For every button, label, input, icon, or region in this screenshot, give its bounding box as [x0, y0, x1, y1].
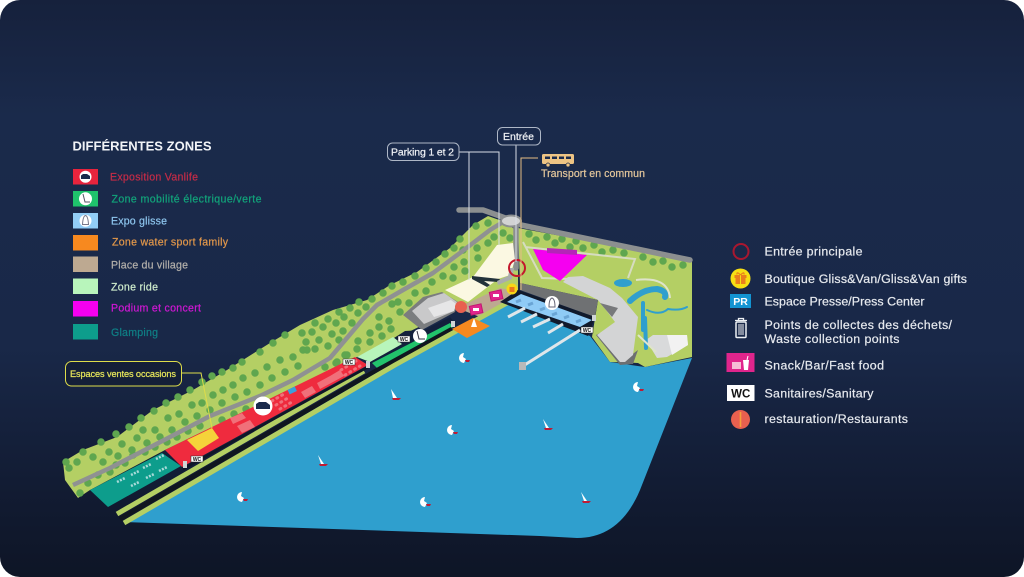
legend item: Zone mobilité: Zone mobilité électrique/verte: [112, 194, 262, 206]
callout: entrance: Entrée: [503, 131, 534, 143]
map icon: WC marker 2: [343, 359, 355, 366]
white east paths: [636, 279, 670, 352]
service: Points de collecte: Points de collectes des déchets/: [764, 318, 953, 332]
service: Snack: Snack/Bar/Fast food: [764, 358, 884, 372]
piers: [508, 308, 580, 366]
map icon: glisse: [545, 296, 559, 310]
legend: zones: [72, 138, 262, 340]
parking area: [445, 243, 515, 302]
map icon: restaurant: [455, 301, 467, 313]
map icon: van: [254, 396, 272, 416]
callout: used sales: [66, 362, 212, 428]
service: Points de collecte: [735, 318, 953, 346]
legend item: Zone water sport family: [73, 235, 229, 250]
pier head: [519, 362, 526, 370]
legend item: Zone ride: Zone ride: [111, 282, 158, 294]
service: Sanitaires: [727, 385, 874, 401]
electric mobility zone: [372, 323, 453, 369]
vanlife booths: [272, 361, 360, 409]
legend heading: DIFFÉRENTES ZONES: [72, 138, 212, 154]
teal glamping zone: [90, 453, 181, 507]
legend item: Zone mobilité: [73, 191, 262, 206]
map icon: WC marker 4: [581, 327, 593, 334]
event plaza: [563, 276, 688, 365]
village plaza: [457, 288, 520, 317]
legend: services: [726, 244, 967, 429]
map icon: WC marker 3: WC: [400, 337, 409, 343]
sailboat: round sail: [237, 353, 644, 507]
legend item: Podium et concert: [73, 301, 201, 316]
service: Entrée principale: Entrée principale: [764, 244, 863, 258]
callout: used sales: Espaces ventes occasions: [70, 369, 176, 379]
legend item: Place du village: [73, 256, 188, 272]
service: Espace Presse: PR: [733, 296, 748, 308]
service: Points de collecte: Waste collection points: [764, 332, 900, 346]
callout: parking: [388, 143, 499, 280]
trees: [66, 223, 683, 493]
podium and concert: [533, 248, 587, 281]
legend item: Podium et concert: Podium et concert: [111, 302, 201, 314]
legend item: Zone ride: [73, 278, 158, 294]
roundabout: [501, 216, 521, 226]
legend item: Glamping: [73, 324, 158, 340]
west park land: [63, 216, 518, 498]
service: Snack: [726, 353, 884, 372]
map icon: WC marker 4: WC: [583, 328, 592, 334]
legend item: Exposition Vanlife: [73, 169, 198, 184]
legend item: Expo glisse: [73, 213, 167, 228]
map icon: entrance ring: [509, 260, 525, 276]
exhibition buildings: [403, 292, 458, 330]
east park land: [518, 228, 692, 367]
callout: public transport: Transport en commun: [541, 168, 645, 180]
lagoon and river: [614, 279, 687, 348]
map icon: WC marker 1: WC: [193, 457, 202, 463]
map icon: scooter: [413, 329, 427, 343]
map icon: snack 2: [469, 304, 483, 315]
service: Restaurants: [731, 410, 908, 429]
map icons: waste bins: [183, 315, 596, 468]
north road: [459, 210, 690, 268]
legend item: Glamping: Glamping: [111, 327, 158, 339]
east sea wall: [520, 283, 598, 317]
callout: parking: Parking 1 et 2: [391, 146, 454, 158]
legend item: Zone water sport family: Zone water sport family: [112, 236, 229, 248]
icon: bus: [542, 154, 574, 167]
service: Boutique: Boutique Gliss&Van/Gliss&Van gifts: [764, 272, 967, 286]
vanlife buildings: [230, 370, 344, 433]
map icon: WC marker 2: WC: [345, 360, 354, 366]
callout: public transport: [521, 154, 645, 290]
used vehicle sales tent: [187, 428, 219, 451]
legend item: Place du village: Place du village: [111, 260, 188, 272]
map icon: WC marker 3: [398, 336, 410, 343]
east paths: [523, 242, 635, 279]
shore strips: [117, 303, 507, 523]
glamping tents: [117, 455, 167, 486]
callout: entrance: [498, 128, 540, 262]
map: [63, 210, 692, 538]
zone ride: [357, 337, 402, 362]
service: Restaurants: restauration/Restaurants: [764, 412, 908, 426]
legend item: Expo glisse: Expo glisse: [111, 216, 167, 228]
map icon: WC marker 1: [191, 456, 203, 463]
red vanlife zone: [165, 357, 368, 467]
west road: [73, 222, 503, 485]
service: Sanitaires: WC: [731, 388, 750, 400]
legend item: Exposition Vanlife: Exposition Vanlife: [110, 172, 198, 184]
service: Boutique: [730, 268, 967, 288]
water sport family zone: [452, 318, 490, 338]
service: Espace Presse: Espace Presse/Press Center: [764, 294, 924, 308]
map icon: snack 1: [489, 290, 503, 301]
map icon: press: [288, 386, 297, 394]
navy gap near ride zone: [360, 317, 454, 364]
service: Sanitaires: Sanitaires/Sanitary: [764, 386, 874, 400]
map icon: boutique: [506, 284, 518, 294]
sailboat: triangle sail: [318, 389, 591, 503]
lake: [125, 303, 692, 538]
marina: [500, 290, 595, 336]
